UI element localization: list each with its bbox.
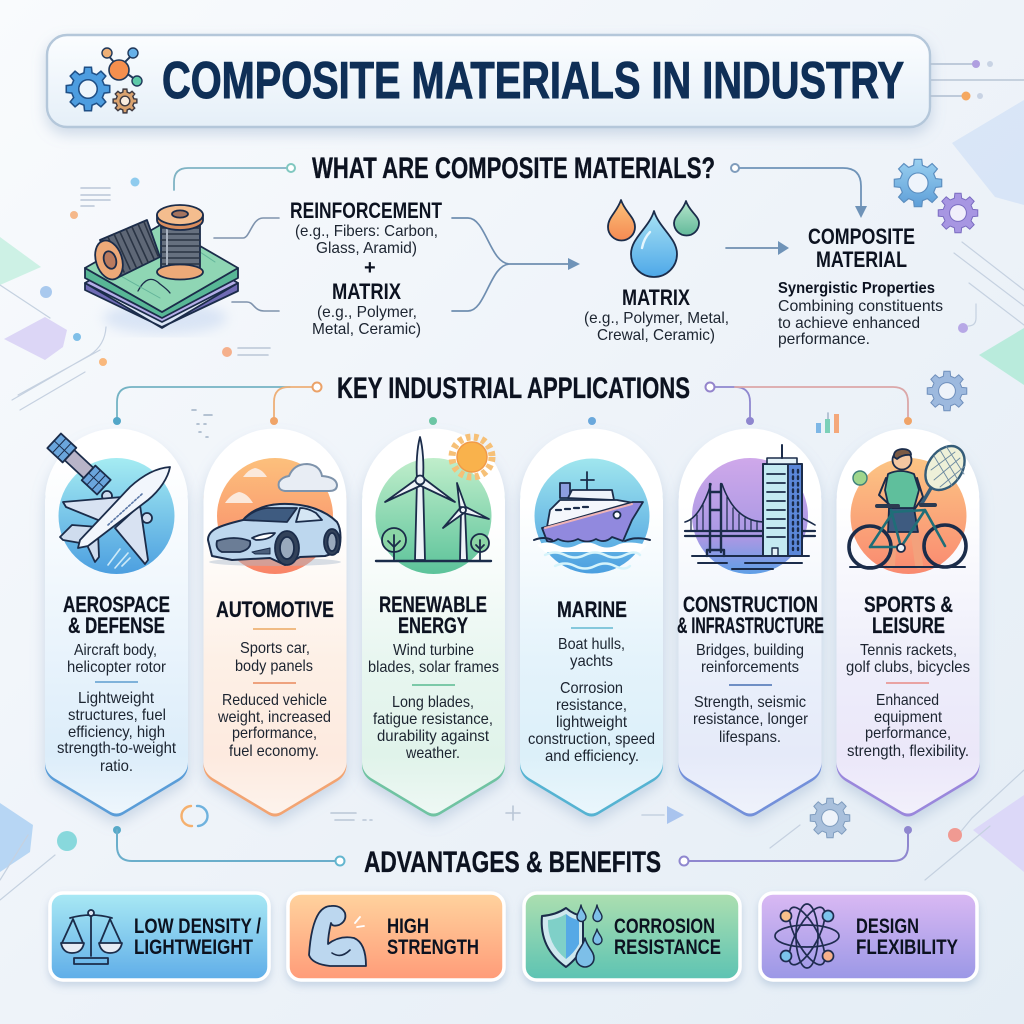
text block: matrix: Crewal, Ceramic) xyxy=(597,327,715,344)
panel: automotive: weight, increased xyxy=(217,709,331,726)
panel: sports and leisure xyxy=(836,428,980,816)
panel: aerospace and defense: strength-to-weight xyxy=(57,740,177,757)
panel: low density lightweight xyxy=(50,893,269,980)
panel: aerospace and defense: AEROSPACE xyxy=(63,592,170,617)
icon: clouds xyxy=(225,464,337,503)
panel: marine: MARINE xyxy=(557,597,627,622)
icon: decorative gears right xyxy=(810,159,978,838)
text block: reinforcement plus matrix xyxy=(290,198,442,338)
heading: what are composite materials: WHAT ARE COMPOSITE MATERIALS? xyxy=(312,152,715,185)
panel: high strength: HIGH xyxy=(387,915,429,938)
icon: fiber spools on layered sheets xyxy=(85,205,238,334)
panel: aerospace and defense: structures, fuel xyxy=(68,707,166,724)
panel: renewable energy: blades, solar frames xyxy=(368,659,499,676)
connector: heading left xyxy=(174,164,295,190)
panel: construction and infrastructure: Strength, seismic xyxy=(694,694,806,711)
icon: cruise ship xyxy=(534,472,650,542)
panel: construction and infrastructure: lifespans. xyxy=(719,729,781,746)
text block: reinforcement plus matrix: Glass, Aramid) xyxy=(316,240,417,257)
panel: automotive: Sports car, xyxy=(240,640,310,657)
panel: construction and infrastructure: CONSTRUCTION xyxy=(683,592,818,617)
icon: waves xyxy=(537,542,647,568)
panel: construction and infrastructure: & INFRASTRUCTURE xyxy=(677,613,824,638)
connectors: applications to cards xyxy=(113,382,912,425)
heading: advantages and benefits: ADVANTAGES & BENEFITS xyxy=(364,846,661,879)
icon: sun xyxy=(452,437,492,477)
icon: cyclist with racket xyxy=(849,439,973,568)
panel: sports and leisure: SPORTS & xyxy=(864,592,953,617)
panel: aerospace and defense: helicopter rotor xyxy=(67,659,167,676)
panel: renewable energy: Long blades, xyxy=(392,694,474,711)
panel: construction and infrastructure: Bridges, building xyxy=(696,642,804,659)
panel: automotive: body panels xyxy=(235,658,313,675)
panel: design flexibility: DESIGN xyxy=(856,915,919,938)
title bar xyxy=(47,35,930,127)
panel: marine xyxy=(520,428,663,816)
panel: design flexibility xyxy=(760,893,977,980)
title side connectors xyxy=(931,60,993,100)
panel: sports and leisure: performance, xyxy=(865,725,951,742)
text block: matrix: (e.g., Polymer, Metal, xyxy=(584,310,729,327)
panel: marine: lightweight xyxy=(556,714,628,731)
heading: key industrial applications: KEY INDUSTRIAL APPLICATIONS xyxy=(337,372,690,405)
panel: renewable energy: ENERGY xyxy=(398,613,468,638)
icon: bridge and tower xyxy=(685,445,815,569)
text block: reinforcement plus matrix: REINFORCEMENT xyxy=(290,198,442,223)
text block: reinforcement plus matrix: (e.g., Fibers: Carbon, xyxy=(295,223,438,240)
icon: matrix droplets xyxy=(608,200,699,277)
panel: automotive: Reduced vehicle xyxy=(222,692,327,709)
panel: high strength: STRENGTH xyxy=(387,936,479,959)
panel: aerospace and defense: efficiency, high xyxy=(68,724,165,741)
panel: renewable energy: weather. xyxy=(405,745,460,762)
panel: construction and infrastructure: reinforcements xyxy=(701,659,799,676)
panel: aerospace and defense: Aircraft body, xyxy=(74,642,157,659)
panel: construction and infrastructure: resistance, longer xyxy=(693,711,809,728)
panel: automotive: fuel economy. xyxy=(229,743,319,760)
icon: balance scale xyxy=(61,910,122,964)
connector: heading right arrow xyxy=(731,164,867,218)
panel: renewable energy: fatigue resistance, xyxy=(373,711,493,728)
panel: aerospace and defense: & DEFENSE xyxy=(68,613,165,638)
panel: marine: Corrosion xyxy=(560,680,623,697)
panel: aerospace and defense: Lightweight xyxy=(78,690,155,707)
panel: renewable energy xyxy=(362,428,505,816)
text block: reinforcement plus matrix: MATRIX xyxy=(332,279,401,304)
panel: sports and leisure: strength, flexibility. xyxy=(847,743,969,760)
panel: automotive xyxy=(204,428,346,816)
text block: composite material: Combining constituents xyxy=(778,298,943,315)
panel: automotive: AUTOMOTIVE xyxy=(216,597,334,622)
arrow: inputs merge to matrix xyxy=(452,218,580,311)
panel: sports and leisure: LEISURE xyxy=(872,613,945,638)
text block: composite material: COMPOSITE xyxy=(808,224,915,249)
connector: cards to advantages left xyxy=(113,826,344,866)
panel: sports and leisure: Tennis rackets, xyxy=(860,642,957,659)
panel: renewable energy: durability against xyxy=(377,728,490,745)
panel: corrosion resistance: CORROSION xyxy=(614,915,715,938)
text block: composite material: to achieve enhanced xyxy=(778,315,920,332)
text block: composite material: MATERIAL xyxy=(816,247,907,272)
panel: sports and leisure: golf clubs, bicycles xyxy=(846,659,970,676)
panel: marine: yachts xyxy=(570,653,613,670)
panel: corrosion resistance: RESISTANCE xyxy=(614,936,721,959)
text block: reinforcement plus matrix: Metal, Ceramic) xyxy=(312,321,421,338)
panel: marine: resistance, xyxy=(556,697,627,714)
panel: aerospace and defense: ratio. xyxy=(100,758,133,775)
panel: automotive: performance, xyxy=(232,725,317,742)
panel: low density lightweight: LIGHTWEIGHT xyxy=(134,936,253,959)
icon: shield and droplets xyxy=(542,905,602,967)
icon: satellite xyxy=(47,433,111,495)
panel: sports and leisure: equipment xyxy=(874,709,943,726)
panel: marine: Boat hulls, xyxy=(558,636,625,653)
icon: atom network xyxy=(775,903,839,969)
panel: design flexibility: FLEXIBILITY xyxy=(856,936,958,959)
panel: marine: and efficiency. xyxy=(545,748,639,765)
panel: renewable energy: RENEWABLE xyxy=(379,592,487,617)
connectors: spool to text xyxy=(214,218,279,311)
arrow: matrix to composite xyxy=(726,241,789,255)
icon: airplane xyxy=(60,467,170,568)
icon: flexed arm xyxy=(309,906,366,966)
connector: cards to advantages right xyxy=(680,826,912,866)
panel: sports and leisure: Enhanced xyxy=(876,692,939,709)
panel: aerospace and defense xyxy=(45,428,188,816)
panel: renewable energy: Wind turbine xyxy=(393,642,474,659)
text block: matrix: MATRIX xyxy=(622,285,690,310)
icon: sports car xyxy=(208,504,341,566)
text block: matrix xyxy=(584,285,729,344)
text block: reinforcement plus matrix: + xyxy=(364,257,376,279)
panel: marine: construction, speed xyxy=(528,731,655,748)
text block: composite material: performance. xyxy=(778,331,870,348)
panel: low density lightweight: LOW DENSITY / xyxy=(134,915,261,938)
text block: composite material: Synergistic Properties xyxy=(778,280,935,297)
icon: wind turbines xyxy=(376,437,491,561)
panel: corrosion resistance xyxy=(524,893,740,980)
icon: gears and molecule xyxy=(66,48,142,113)
panel: high strength xyxy=(288,893,504,980)
text block: composite material xyxy=(778,224,943,348)
panel: construction and infrastructure xyxy=(677,428,824,816)
text block: reinforcement plus matrix: (e.g., Polymer, xyxy=(317,304,417,321)
